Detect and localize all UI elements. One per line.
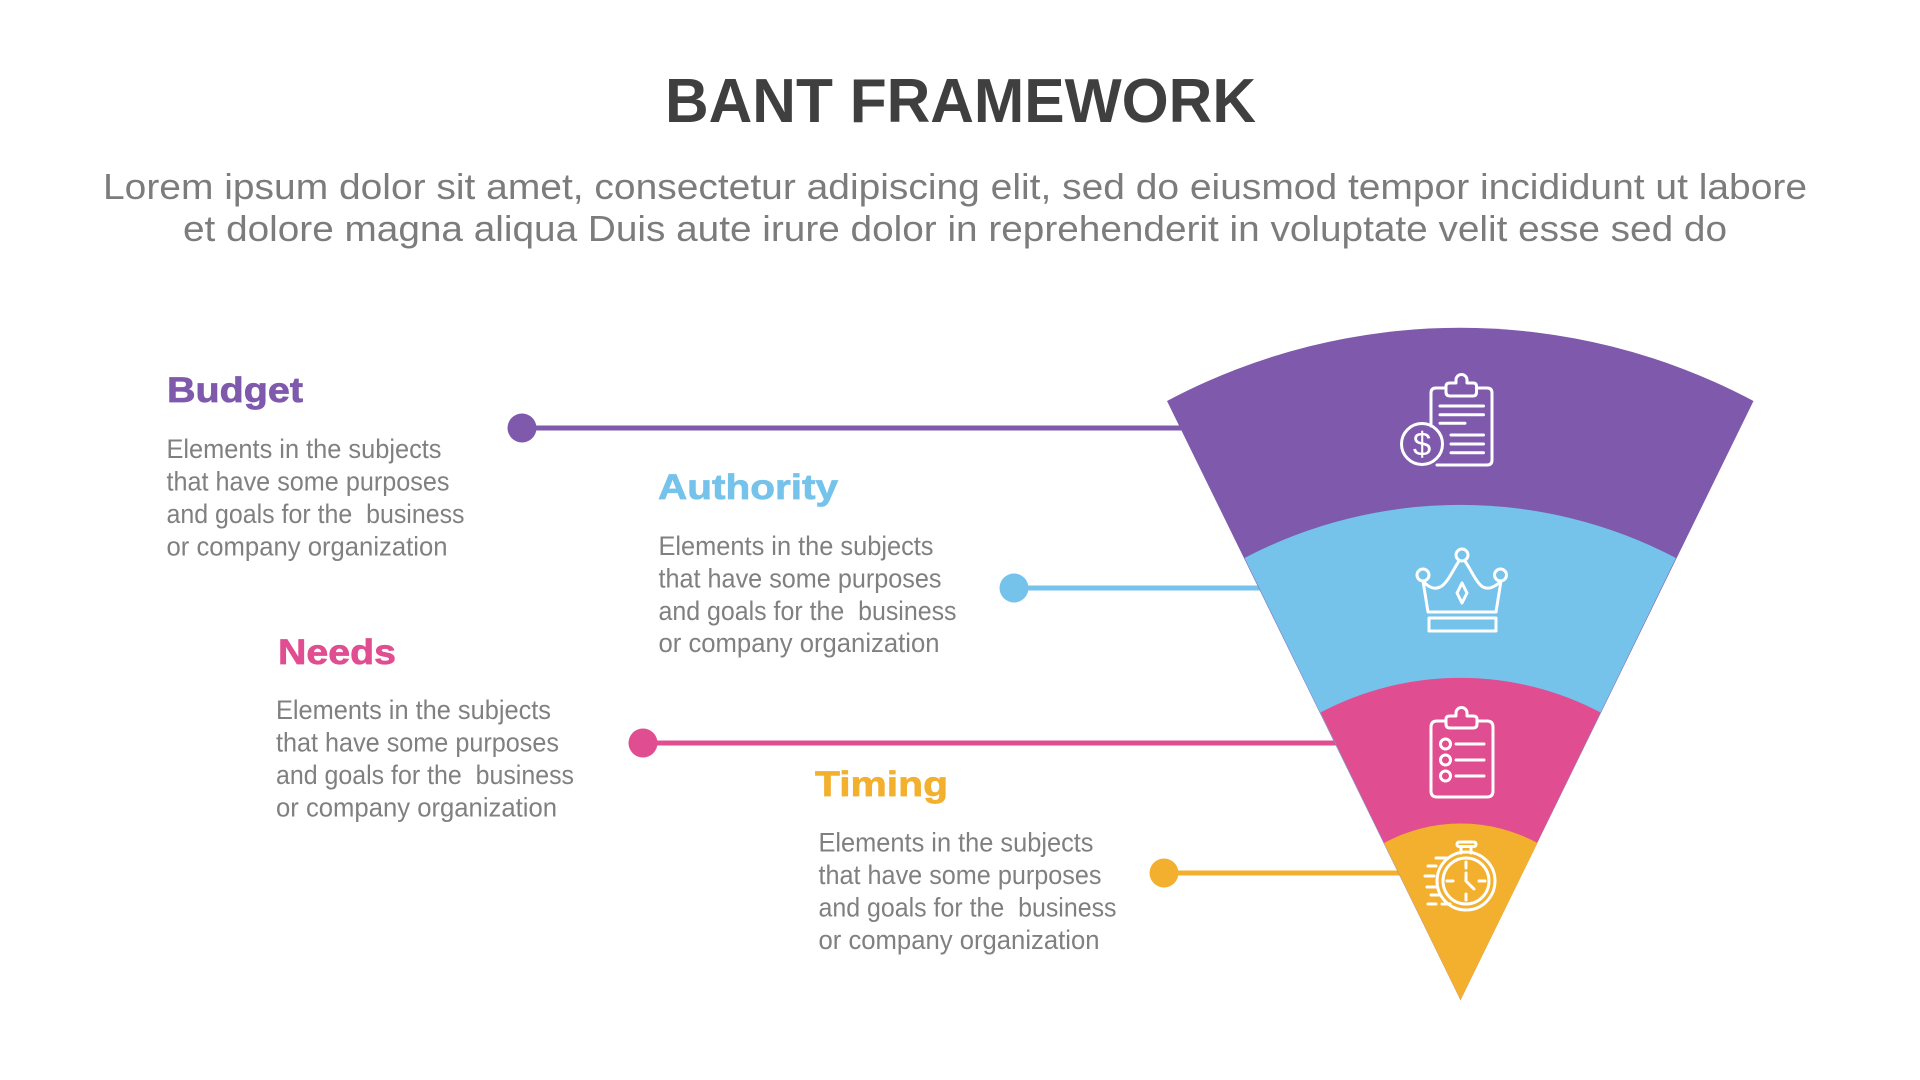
text block: budget: or company organization <box>166 532 448 562</box>
funnel segment: budget <box>1167 328 1754 1000</box>
funnel segment: timing <box>1384 824 1538 1000</box>
icon: checklist clipboard <box>1431 708 1493 797</box>
connector: budget <box>508 414 1184 442</box>
text block: budget: that have some purposes <box>166 466 450 496</box>
text block: needs: Needs <box>278 633 396 672</box>
text block: budget <box>166 371 464 562</box>
icon: clipboard with dollar coin: $ <box>1413 426 1431 462</box>
text block: budget: Elements in the subjects <box>166 434 442 464</box>
text block: budget: and goals for the business <box>166 499 464 529</box>
text block: timing: and goals for the business <box>818 892 1116 922</box>
text block: budget: Budget <box>167 371 303 410</box>
text block: authority: Authority <box>658 468 839 507</box>
connector: authority <box>1000 574 1262 602</box>
text block: authority: and goals for the business <box>658 596 956 626</box>
text block: authority <box>658 468 956 658</box>
text block: needs: or company organization <box>276 792 557 822</box>
connector: needs <box>628 728 1338 758</box>
icon: crown <box>1417 549 1506 631</box>
text block: needs <box>276 633 574 822</box>
funnel segment: needs <box>1320 678 1600 1000</box>
text block: timing: Elements in the subjects <box>818 828 1094 858</box>
icon: stopwatch <box>1425 842 1495 910</box>
text block: needs: Elements in the subjects <box>276 695 551 725</box>
text block: timing: that have some purposes <box>818 860 1102 890</box>
subtitle text <box>103 166 1807 249</box>
connector: timing <box>1150 858 1400 888</box>
text block: authority: or company organization <box>658 628 940 658</box>
icon: clipboard with dollar coin <box>1402 374 1492 465</box>
text block: authority: that have some purposes <box>658 564 942 594</box>
text block: timing: or company organization <box>818 925 1100 955</box>
text block: authority: Elements in the subjects <box>658 531 934 561</box>
text block: timing: Timing <box>815 765 948 804</box>
funnel segment: authority <box>1244 505 1676 1000</box>
subtitle text: Lorem ipsum dolor sit amet, consectetur adipiscing elit, sed do eiusmod tempor incididunt ut labore <box>103 166 1807 207</box>
text block: needs: that have some purposes <box>276 728 559 758</box>
subtitle text: et dolore magna aliqua Duis aute irure dolor in reprehenderit in voluptate velit esse sed do <box>183 208 1727 249</box>
text block: timing <box>815 765 1116 955</box>
text block: needs: and goals for the business <box>276 760 574 790</box>
title: BANT FRAMEWORK <box>665 67 1256 136</box>
